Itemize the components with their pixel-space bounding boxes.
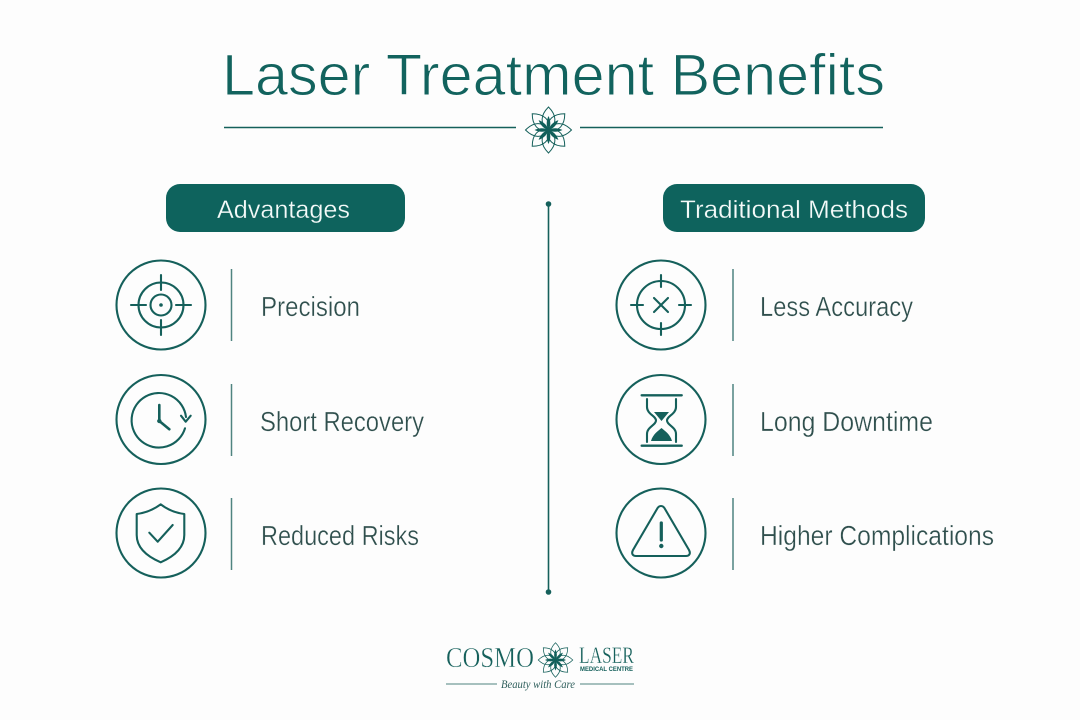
logo: Cosmo Laser: LASER [579,643,634,668]
heading: Traditional Methods: Traditional Methods [680,196,908,224]
icon: shield check [116,488,206,578]
logo: Cosmo Laser: Beauty with Care [501,677,576,691]
row: Higher Complications: Higher Complications [760,520,994,551]
row: Reduced Risks: Reduced Risks [261,520,419,551]
heading: Advantages [166,184,405,232]
panel: advantages [116,184,424,578]
row: Higher Complications [616,488,994,578]
row: Short Recovery [116,375,424,464]
icon: clock with arrow [116,375,206,464]
row: Reduced Risks [116,488,419,578]
row: Less Accuracy [616,260,913,350]
row: Less Accuracy: Less Accuracy [760,291,913,322]
icon: hourglass [616,375,706,464]
icon: target [116,260,206,350]
heading: Advantages: Advantages [217,196,350,224]
logo: Cosmo Laser: MEDICAL CENTRE [580,667,633,673]
heading: Traditional Methods [663,184,925,232]
title ornament: divider with flower [224,107,883,153]
row: Precision: Precision [261,291,360,322]
icon: target with x [616,260,706,350]
centre vertical divider [546,201,551,595]
panel: traditional methods [616,184,994,578]
logo: Cosmo Laser: COSMO [446,643,534,674]
icon: warning triangle [616,488,706,578]
row: Precision [116,260,360,350]
row: Short Recovery: Short Recovery [260,406,424,437]
row: Long Downtime: Long Downtime [760,406,933,437]
title: Laser Treatment Benefits [222,43,885,108]
logo: Cosmo Laser [446,643,634,691]
row: Long Downtime [616,375,933,464]
